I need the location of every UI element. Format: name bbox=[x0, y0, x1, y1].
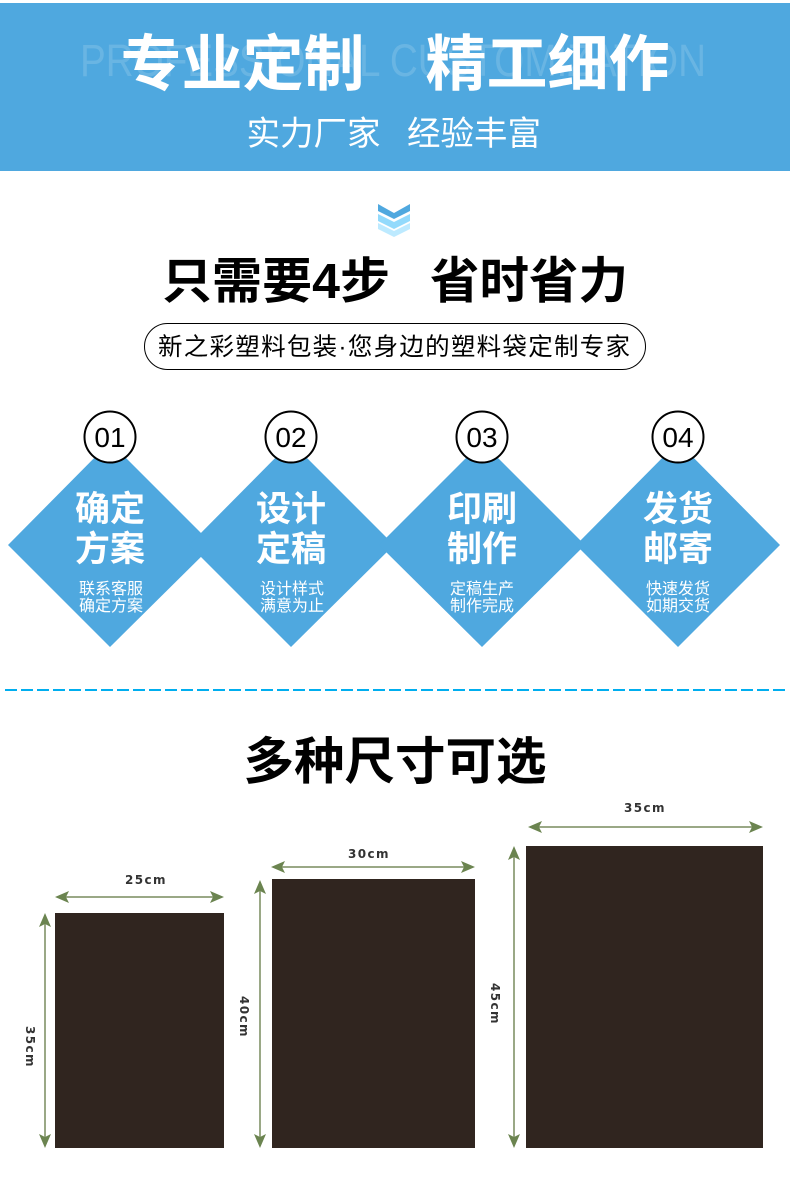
step 4: 发货 bbox=[643, 490, 713, 529]
step 3 bbox=[379, 412, 585, 647]
step 4: 04 bbox=[662, 422, 694, 453]
size: 30x40 bbox=[237, 847, 475, 1148]
size: 35x45 bbox=[488, 801, 763, 1148]
step 3: 03 bbox=[466, 422, 498, 453]
size: 30x40: 40cm bbox=[237, 996, 251, 1038]
tagline pill: 新之彩塑料包装·您身边的塑料袋定制专家 bbox=[158, 333, 630, 361]
tagline pill bbox=[144, 324, 646, 370]
banner watermark: PROFESSIONAL CUSTOMIZATION bbox=[80, 35, 706, 86]
size: 25x35: 35cm bbox=[23, 1026, 37, 1068]
banner subtitle: 经验丰富 bbox=[407, 116, 541, 153]
size: 30x40: 30cm bbox=[348, 847, 390, 861]
size: 35x45: 45cm bbox=[488, 983, 502, 1025]
step 4: 邮寄 bbox=[643, 530, 713, 569]
step 2: 设计样式 bbox=[260, 580, 324, 598]
step 2 bbox=[189, 412, 394, 647]
step 3: 定稿生产 bbox=[450, 580, 514, 598]
step 1: 确定方案 bbox=[79, 597, 143, 615]
step 3: 制作 bbox=[447, 530, 517, 569]
heading: steps bbox=[162, 254, 628, 309]
size: 35x45: 35cm bbox=[624, 801, 666, 815]
step 1 bbox=[8, 412, 213, 647]
step 2: 满意为止 bbox=[260, 596, 324, 615]
step 3: 印刷 bbox=[447, 490, 517, 529]
step 2: 02 bbox=[275, 422, 307, 453]
step 4: 如期交货 bbox=[646, 597, 710, 615]
banner bbox=[0, 3, 790, 171]
step 3: 制作完成 bbox=[450, 597, 514, 615]
step 4 bbox=[576, 412, 780, 647]
banner subtitle bbox=[246, 116, 541, 153]
step 1: 确定 bbox=[75, 490, 145, 529]
step 1: 01 bbox=[94, 422, 126, 453]
step 2: 设计 bbox=[256, 490, 326, 529]
step 4: 快速发货 bbox=[646, 580, 710, 598]
size: 25x35 bbox=[23, 873, 224, 1148]
heading: sizes: 多种尺寸可选 bbox=[244, 733, 546, 790]
size: 25x35: 25cm bbox=[125, 873, 167, 887]
heading: steps: 只需要4步 bbox=[162, 255, 390, 309]
banner subtitle: 实力厂家 bbox=[246, 116, 380, 153]
heading: steps: 省时省力 bbox=[430, 254, 628, 309]
icon: chevrons bbox=[378, 204, 410, 237]
step 1: 联系客服 bbox=[79, 580, 143, 598]
step 1: 方案 bbox=[75, 530, 145, 569]
step 2: 定稿 bbox=[256, 530, 326, 569]
banner title: 专业定制 精工细作 bbox=[120, 30, 670, 98]
